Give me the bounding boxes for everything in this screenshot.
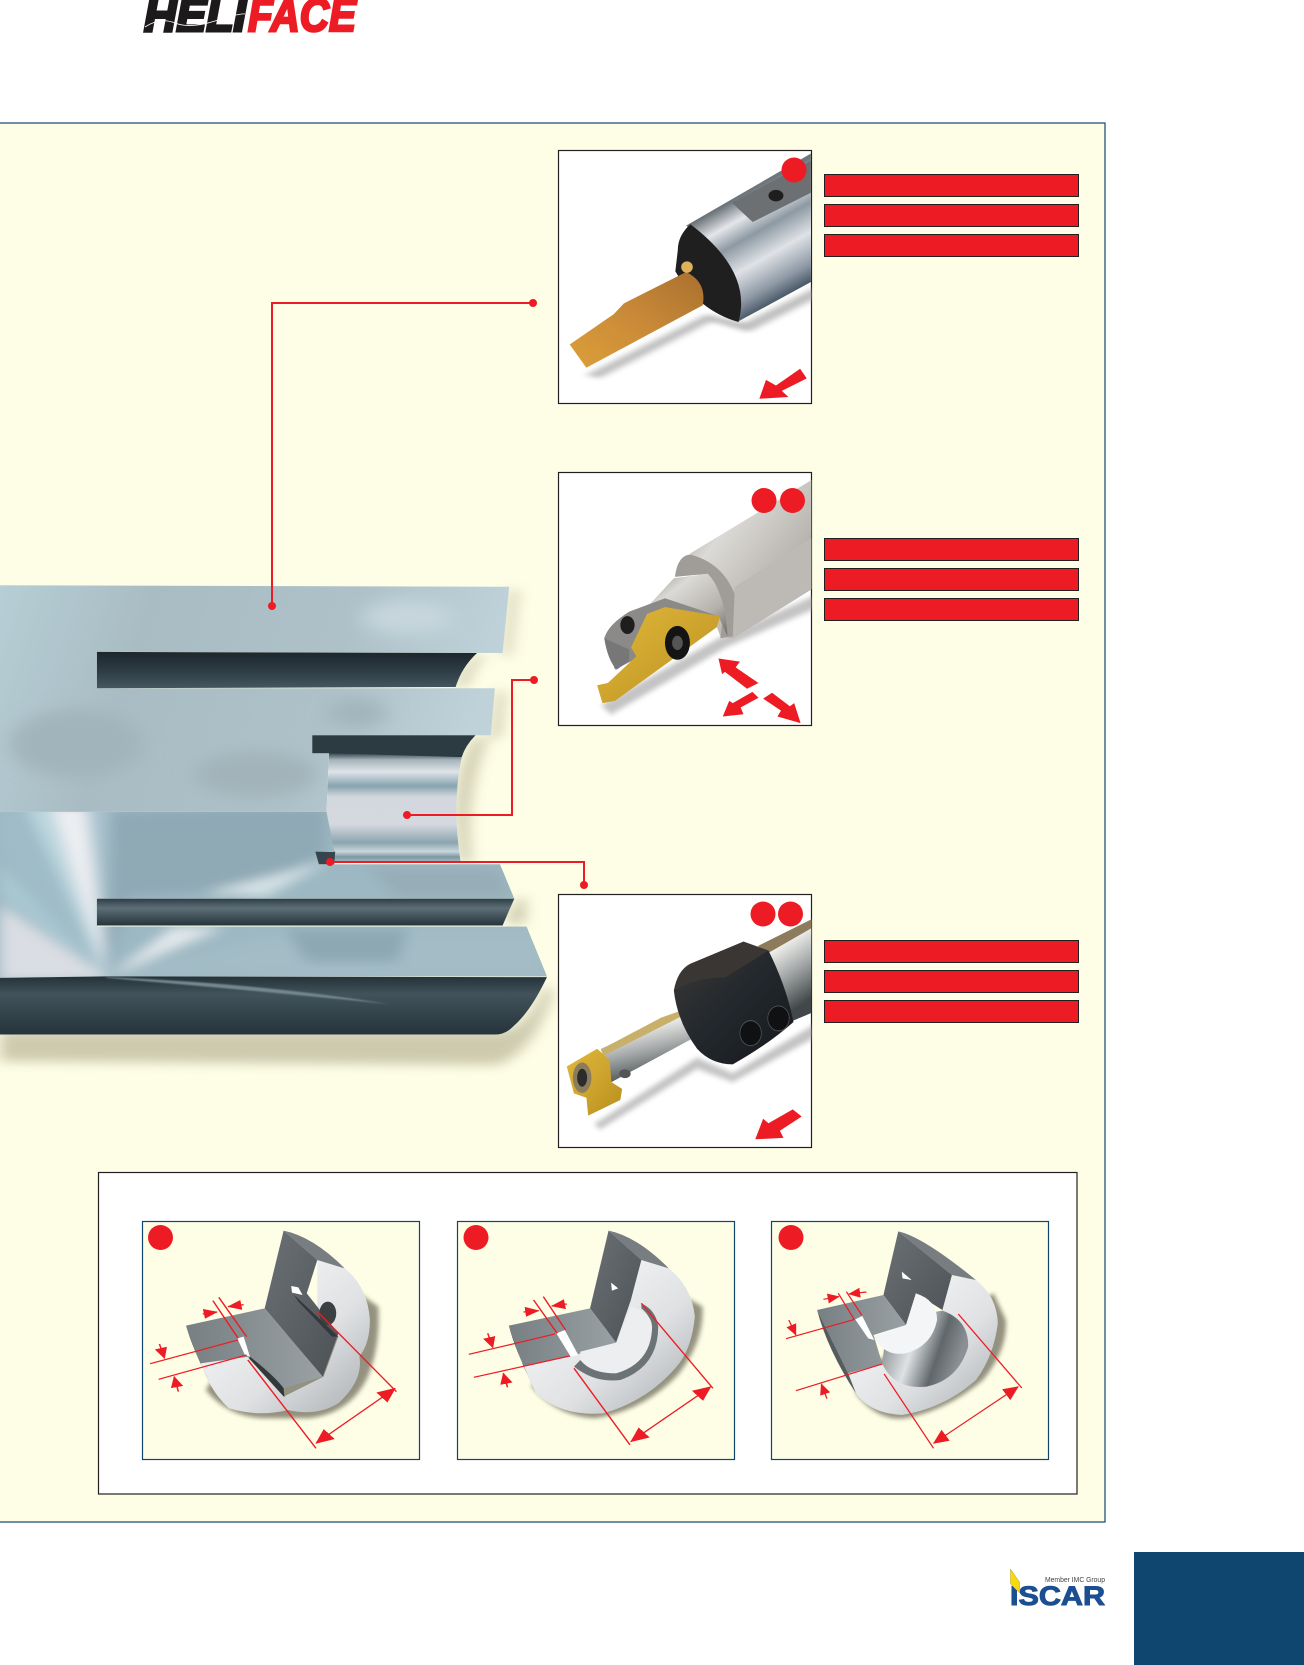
panel: tool 2 photo (558, 472, 818, 726)
badge (464, 1225, 488, 1250)
bars: tool 2 spec (824, 538, 1078, 620)
panel: groove types (98, 1172, 1077, 1494)
bars: tool 1 spec (824, 174, 1078, 256)
connector: bore dot to tool 2 (403, 676, 538, 819)
panel: groove diagram A (142, 1222, 420, 1460)
badges (750, 902, 803, 926)
badge (148, 1225, 173, 1250)
badge (782, 158, 806, 182)
logo: HeliFace (144, 0, 357, 41)
connector: groove dot to tool 3 (326, 858, 588, 889)
badges (752, 488, 805, 513)
page tab (1134, 1552, 1304, 1665)
logo: Iscar (1010, 1569, 1105, 1611)
badge (778, 1225, 804, 1250)
panel: groove diagram B (458, 1222, 734, 1460)
panel: tool 1 photo (558, 150, 819, 404)
panel: tool 3 photo (558, 894, 818, 1148)
connector: top dot to tool 1 (268, 299, 537, 610)
panel: cream background (0, 123, 1105, 1522)
logo: Iscar: Member IMC Group (1045, 1577, 1105, 1584)
logo: Iscar: ISCAR (1010, 1581, 1105, 1611)
bars: tool 3 spec (824, 940, 1078, 1022)
panel: groove diagram C (772, 1222, 1048, 1460)
workpiece: cutaway bored part (0, 585, 554, 1065)
